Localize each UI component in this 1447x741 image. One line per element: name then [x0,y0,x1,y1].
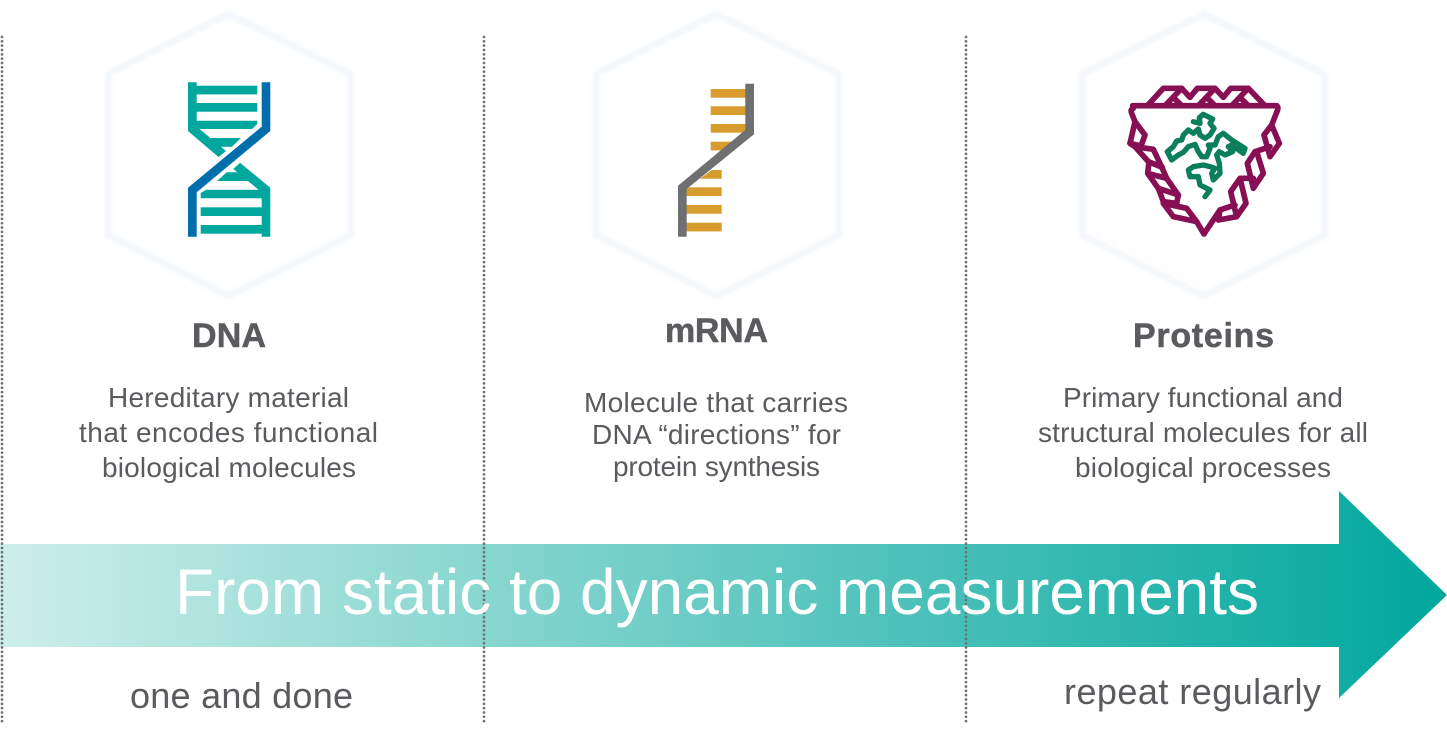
icon frame: DNA hexagon [108,14,351,296]
icon: DNA double helix [188,82,270,237]
description: DNA: that encodes functional [79,417,378,448]
description: Proteins: biological processes [1075,452,1331,483]
description: Proteins [1038,382,1368,483]
arrow: static to dynamic [0,491,1447,698]
description: mRNA: Molecule that carries [584,387,848,418]
description: mRNA: protein synthesis [613,451,820,482]
description: mRNA [584,387,848,482]
panel: DNA [79,14,378,483]
label: one and done: one and done [130,675,353,716]
icon: folded protein [1130,88,1279,234]
protein left ribbon [1130,108,1204,234]
icon frame: protein hexagon [1082,14,1325,296]
protein right ribbon [1204,106,1279,233]
heading: DNA: DNA [192,317,266,355]
icon: mRNA single strand [678,84,754,237]
heading: mRNA: mRNA [665,312,768,350]
description: DNA [79,382,378,483]
description: DNA: Hereditary material [108,382,349,413]
panel: mRNA [584,14,848,482]
arrow label: From static to dynamic measurements [175,556,1259,628]
description: Proteins: Primary functional and [1063,382,1343,413]
protein green coil [1167,114,1245,197]
heading: Proteins: Proteins [1133,317,1274,355]
icon frame: mRNA hexagon [596,14,839,296]
description: mRNA: DNA “directions” for [592,419,841,450]
description: Proteins: structural molecules for all [1038,417,1368,448]
label: repeat regularly: repeat regularly [1064,671,1321,712]
description: DNA: biological molecules [102,452,356,483]
panel: Proteins [1038,14,1368,483]
protein top ribbon [1133,88,1277,106]
